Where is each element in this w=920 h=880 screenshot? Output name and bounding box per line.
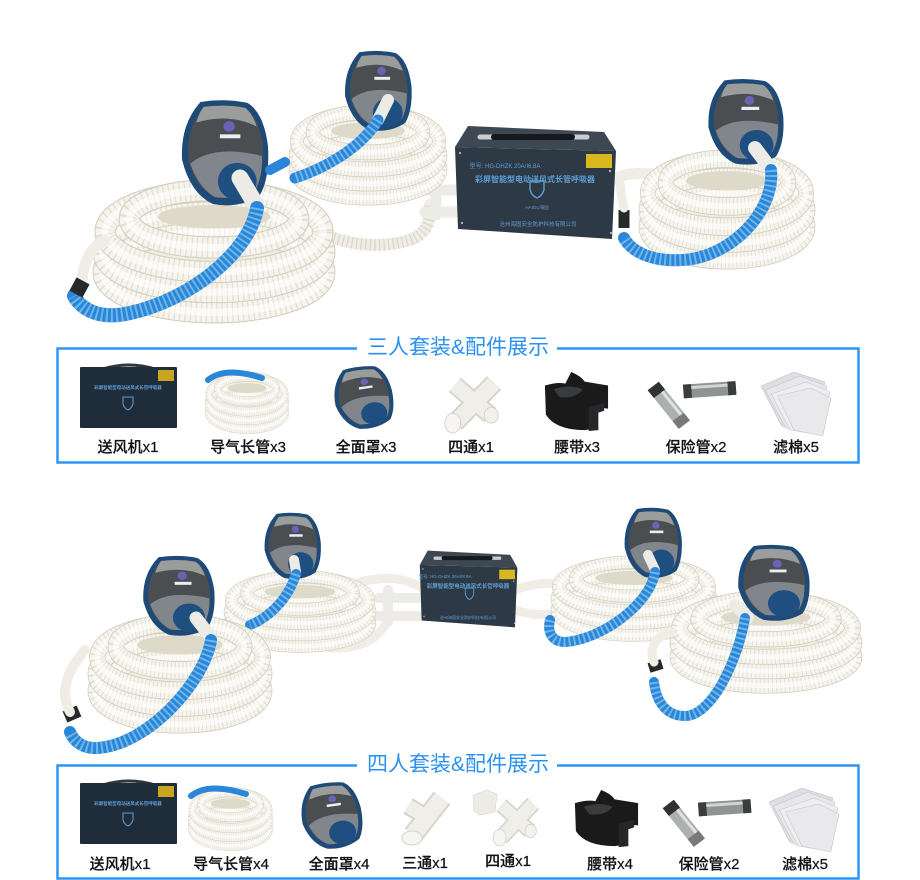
blue hose B bbox=[270, 120, 378, 178]
breathing mask B bbox=[345, 51, 412, 131]
accessory: four-way connector bbox=[445, 383, 498, 433]
label: mask x4: 全面罩x4 bbox=[309, 855, 369, 873]
product photo: three-person breathing set bbox=[73, 51, 809, 315]
blower box, four-person set: 沧州海固安全防护科技有限公司 bbox=[440, 614, 496, 620]
blower box, three-person set: 沧州海固安全防护科技有限公司 bbox=[499, 220, 577, 228]
label: belt x3: 腰带x3 bbox=[554, 439, 600, 456]
breathing mask F bbox=[625, 508, 682, 578]
panel: four-person set and accessories bbox=[58, 750, 858, 878]
label: three-way x1: 三通x1 bbox=[402, 855, 448, 872]
blower box, three-person set bbox=[455, 126, 616, 239]
panel: three-person set and accessories bbox=[58, 334, 858, 462]
breathing mask E bbox=[265, 513, 321, 579]
label: blower x1: 送风机x1 bbox=[90, 856, 150, 873]
label: mask x3: 全面罩x3 bbox=[336, 438, 396, 456]
blue hose E bbox=[250, 560, 296, 625]
breathing mask C bbox=[708, 79, 784, 165]
hose coil E bbox=[229, 577, 371, 646]
blower box, four-person set bbox=[418, 551, 517, 627]
label: four-way x1: 四通x1 bbox=[485, 853, 531, 870]
breathing mask A bbox=[182, 100, 268, 205]
heading: three-person set: 三人套装&配件展示 bbox=[367, 336, 549, 359]
heading: four-person set: 四人套装&配件展示 bbox=[367, 753, 549, 776]
accessory: fuses bbox=[648, 381, 736, 429]
hose coil D bbox=[94, 623, 266, 724]
accessory: hose coil bbox=[191, 788, 270, 846]
accessory: three-way connector bbox=[402, 798, 442, 845]
blower box, three-person set: 彩屏智能型电动送风式长管呼吸器 bbox=[475, 174, 595, 184]
accessory: filter cotton bbox=[761, 372, 831, 436]
accessory: four-way connector with adapter bbox=[473, 790, 536, 846]
label: fuse x2: 保险管x2 bbox=[666, 438, 726, 456]
blue hose A bbox=[73, 178, 257, 315]
air tube, right side of box bbox=[612, 173, 660, 180]
breathing mask D bbox=[143, 556, 215, 636]
accessory: waist belt bbox=[575, 790, 638, 847]
accessory: full face mask bbox=[331, 363, 397, 433]
label: four-way x1: 四通x1 bbox=[448, 439, 494, 456]
accessory: waist belt bbox=[545, 372, 608, 431]
accessory: blower: 彩屏智能型电动送风式长管呼吸器 bbox=[94, 800, 162, 807]
label: filter x5: 滤棉x5 bbox=[782, 856, 828, 873]
blower box, four-person set: 型号: HG-DHZK 36A/I8.8A bbox=[418, 573, 472, 580]
hose coil A bbox=[101, 190, 327, 312]
accessory: filter cotton bbox=[769, 788, 839, 852]
blue hose F bbox=[549, 555, 655, 642]
accessory: fuses bbox=[663, 799, 751, 847]
air tubes and manifolds to box bbox=[330, 578, 565, 648]
hose coil B bbox=[294, 112, 442, 198]
blue hose D bbox=[65, 618, 211, 748]
label: blower x1: 送风机x1 bbox=[98, 439, 158, 456]
hose coil F bbox=[557, 562, 711, 635]
air tube manifold, left bbox=[415, 172, 458, 215]
blower box, four-person set: 彩屏智能型电动送风式长管呼吸器 bbox=[427, 582, 510, 590]
hose coil G bbox=[676, 598, 856, 686]
blower box, three-person set: HAIGU海固 bbox=[525, 204, 549, 211]
blower box, three-person set: 型号: HG-DHZK 20A/I6.8A bbox=[470, 162, 540, 170]
product photo: four-person breathing set bbox=[65, 508, 856, 748]
accessory: blower: 彩屏智能型电动送风式长管呼吸器 bbox=[94, 384, 162, 391]
accessory: full face mask bbox=[297, 779, 366, 853]
label: hose x4: 导气长管x4 bbox=[193, 855, 269, 873]
breathing mask G bbox=[738, 545, 810, 621]
blue hose G bbox=[649, 605, 748, 716]
label: filter x5: 滤棉x5 bbox=[773, 439, 819, 456]
hose coil C bbox=[645, 159, 809, 260]
air tube: box to coil A bbox=[325, 205, 430, 245]
label: belt x4: 腰带x4 bbox=[587, 856, 633, 873]
label: hose x3: 导气长管x3 bbox=[210, 438, 286, 456]
blue hose C bbox=[620, 148, 771, 260]
accessory: blower bbox=[80, 365, 177, 428]
accessory: blower bbox=[80, 781, 177, 844]
accessory: hose coil bbox=[208, 372, 286, 429]
label: fuse x2: 保险管x2 bbox=[679, 855, 739, 873]
